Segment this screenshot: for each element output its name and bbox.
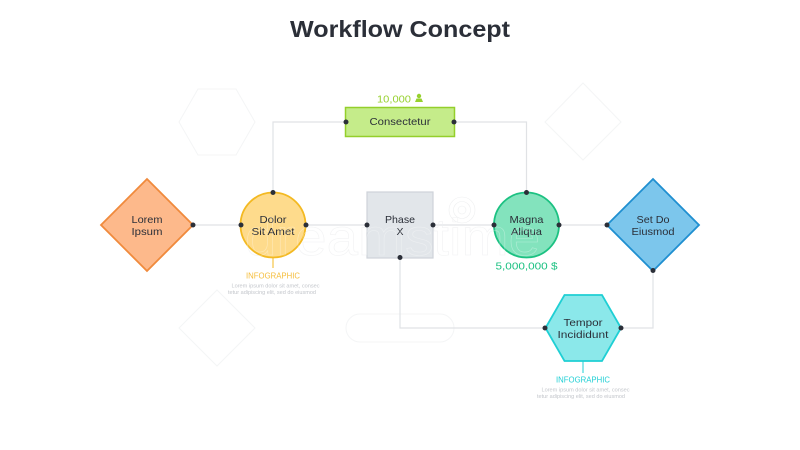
shape: Tempor Incididunt hexagon: Incididunt (558, 329, 609, 341)
shape: Dolor Sit Amet circle: Sit Amet (252, 226, 295, 238)
callout: cyan infographic note: INFOGRAPHIC (556, 376, 610, 384)
shape: Lorem Ipsum diamond: Ipsum (132, 226, 163, 238)
callout: yellow infographic note: tetur adipiscing elit, sed do eiusmod (228, 290, 316, 296)
shape: Phase X square: Phase (385, 214, 415, 226)
shape: Tempor Incididunt hexagon: Tempor (564, 317, 603, 329)
shape: Phase X square: X (396, 226, 404, 238)
shape: Consectetur rectangle (346, 108, 454, 136)
callout: yellow infographic note (228, 258, 320, 296)
label: 10,000 with person icon: 10,000 (377, 94, 411, 106)
shape: Magna Aliqua circle: Aliqua (511, 226, 542, 238)
callout: cyan infographic note (537, 361, 630, 400)
shape: Dolor Sit Amet circle: Dolor (260, 214, 287, 226)
callout: yellow infographic note: INFOGRAPHIC (246, 272, 300, 280)
shape: Dolor Sit Amet circle (240, 192, 306, 258)
shape: Lorem Ipsum diamond: Lorem (132, 214, 163, 226)
title: Workflow Concept (290, 16, 510, 42)
ghost placeholder shapes (179, 83, 621, 366)
callout: yellow infographic note: Lorem ipsum dolor sit amet, consec (232, 284, 320, 290)
connector dots (190, 120, 656, 330)
shape: Tempor Incididunt hexagon (546, 295, 621, 361)
shape: Magna Aliqua circle: Magna (510, 214, 544, 226)
shape: Lorem Ipsum diamond (101, 179, 193, 271)
callout: cyan infographic note: tetur adipiscing elit, sed do eiusmod (537, 394, 625, 400)
watermark overlay on shapes: dreamstime (245, 209, 540, 267)
shape: Phase X square (367, 192, 433, 258)
shape: Consectetur rectangle: Consectetur (370, 116, 431, 128)
connector lines (193, 122, 653, 328)
watermark: dreamstime (245, 209, 540, 267)
label: 5,000,000 $: 5,000,000 $ (496, 260, 558, 272)
shape: Magna Aliqua circle (494, 192, 559, 258)
label: 10,000 with person icon (377, 94, 423, 106)
callout: cyan infographic note: Lorem ipsum dolor sit amet, consec (542, 388, 630, 394)
shape: Set Do Eiusmod diamond: Eiusmod (632, 226, 675, 238)
shape: Set Do Eiusmod diamond (607, 179, 699, 271)
shape: Set Do Eiusmod diamond: Set Do (636, 214, 670, 226)
